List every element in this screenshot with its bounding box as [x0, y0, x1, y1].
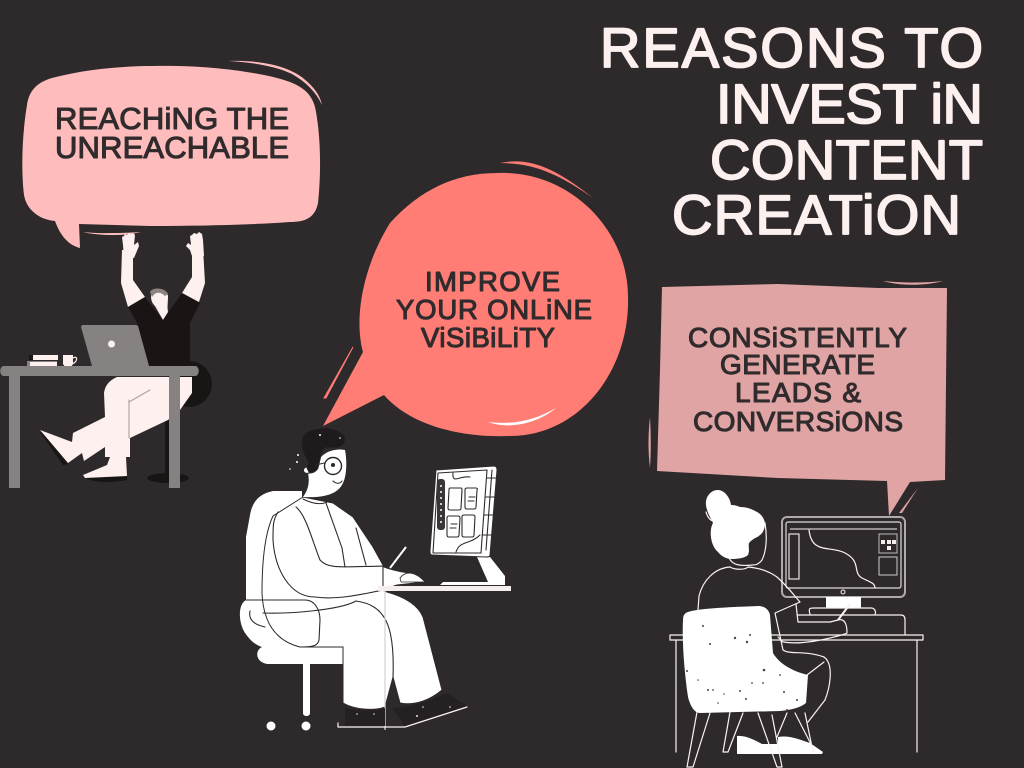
heading: bubble one text: UNREACHABLE	[55, 130, 289, 165]
books and cup	[27, 361, 57, 367]
figure arms and hands	[121, 248, 205, 307]
desk	[0, 366, 199, 488]
heading: bubble three text	[688, 322, 907, 437]
woman head and bun	[706, 490, 766, 565]
panel: speech bubble consistently generate leads and conversions	[648, 281, 947, 516]
figure trousers and shoes	[40, 377, 192, 478]
white armchair with speckles	[683, 606, 808, 713]
leg line	[384, 591, 386, 730]
illustration: man with raised arms at desk	[0, 232, 212, 488]
illustration: man with glasses at monitor	[240, 428, 511, 730]
tablet monitor	[430, 466, 505, 585]
stylus	[838, 604, 850, 620]
computer monitor	[782, 517, 905, 635]
shoes	[737, 736, 823, 754]
title	[600, 16, 983, 246]
figure head	[151, 291, 168, 320]
illustration: woman from behind at computer	[670, 490, 923, 767]
title: REASONS TO	[600, 16, 983, 79]
panel: speech bubble reaching the unreachable	[22, 61, 322, 248]
woman body outline	[698, 567, 847, 722]
heading: bubble two text: YOUR ONLiNE	[396, 294, 592, 325]
heading: bubble three text: CONVERSiONS	[693, 406, 903, 437]
shoes with speckles	[345, 693, 467, 726]
title: INVEST iN	[716, 72, 983, 135]
heading: bubble one text	[55, 101, 289, 165]
title: CONTENT	[710, 128, 983, 191]
head with hair and glasses	[303, 450, 346, 497]
heading: bubble three text: GENERATE	[720, 349, 875, 380]
heading: bubble one text: REACHiNG THE	[55, 101, 289, 136]
desk and hand	[400, 573, 425, 582]
desk	[670, 635, 923, 752]
chair	[240, 491, 345, 730]
pencil	[390, 547, 406, 568]
chair legs	[687, 712, 815, 767]
heading: bubble three text: LEADS &	[735, 377, 861, 408]
heading: bubble two text: IMPROVE	[425, 266, 560, 297]
title: CREATiON	[672, 183, 961, 246]
seated body	[262, 497, 442, 709]
heading: bubble two text	[396, 266, 592, 353]
heading: bubble three text: CONSiSTENTLY	[688, 322, 907, 353]
laptop	[81, 325, 149, 366]
heading: bubble two text: ViSiBiLiTY	[421, 322, 555, 353]
panel: speech bubble improve your online visibility	[323, 161, 628, 436]
figure black shirt	[128, 293, 200, 366]
